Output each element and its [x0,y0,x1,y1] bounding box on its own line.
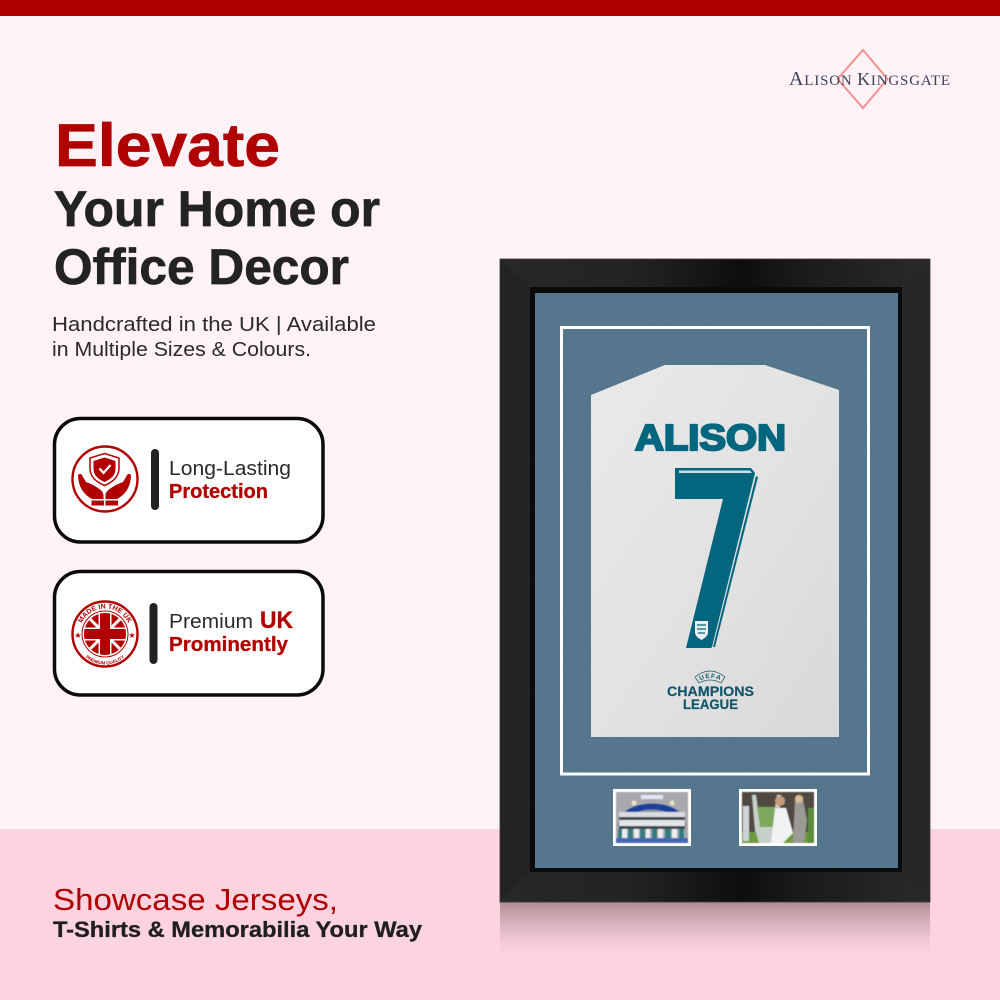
icon: made in the UK seal [71,600,139,668]
card text: Premium [169,611,253,633]
jersey name: ALISON [635,417,786,458]
Champions League logo: CHAMPIONS [667,683,754,699]
card outline [54,418,323,542]
title [54,112,380,295]
jersey number 7 [675,468,758,648]
bottom caption: T-Shirts & Memorabilia Your Way [53,917,423,942]
icon: made in the UK seal: ★ [128,631,136,640]
card: premium UK: UK [260,607,294,634]
photo: winners team [613,789,691,846]
card: long-lasting protection: Protection [169,481,268,503]
card: premium UK [52,570,325,697]
card: long-lasting protection [54,418,323,542]
frame reflection [500,902,930,962]
jersey mesh [591,365,839,737]
title line: Elevate: Elevate [55,112,280,179]
subtitle [52,314,376,361]
logo: Alison Kingsgate [789,50,950,108]
black frame [500,259,930,902]
photo: player with trophy [739,789,817,846]
icon: shield in hands [72,446,138,512]
divider [150,603,158,664]
bottom band [0,829,1000,1000]
icon: made in the UK seal: ★ [74,631,82,640]
crest on number [695,621,708,640]
Champions League logo [667,670,754,712]
Champions League logo: LEAGUE [683,696,738,712]
blue mat [535,293,898,868]
Champions League logo: UEFA [699,674,720,680]
icon: made in the UK seal: PREMIUM QUALITY [86,655,124,665]
jersey [591,365,839,737]
divider [151,449,159,510]
title line: Your Home or: Your Home or [54,181,380,237]
logo diamond [838,50,888,108]
card outline [54,572,323,695]
bottom caption [53,882,423,942]
logo wordmark: ALISON KINGSGATE [789,68,950,90]
white inner border [562,328,868,774]
subtitle: Handcrafted in the UK | Available [52,314,376,336]
bottom caption: Showcase Jerseys, [53,882,338,917]
top bar [0,0,1000,16]
card: premium UK: Prominently [169,634,289,656]
mat texture [535,293,898,868]
framed jersey [500,258,930,902]
card text: Long-Lasting [169,458,291,480]
title line: Office Decor: Office Decor [54,239,349,295]
icon: made in the UK seal: MADE IN THE UK [78,604,132,623]
jersey body [591,365,839,737]
subtitle: in Multiple Sizes & Colours. [52,339,311,361]
